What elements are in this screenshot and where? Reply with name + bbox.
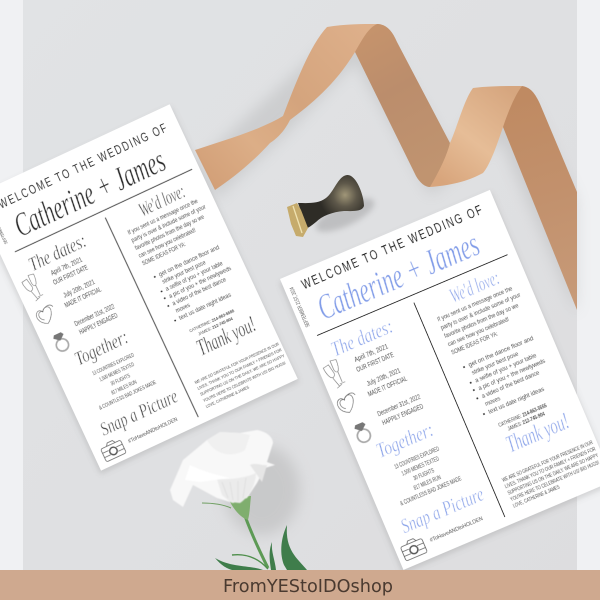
together stats xyxy=(84,349,157,412)
contacts: CATHERINE: 214-863-5555 xyxy=(188,308,236,334)
message paragraph: party is over & include some of your xyxy=(130,204,207,244)
message paragraph: party is over & include some of your xyxy=(440,291,522,332)
icon: hearts xyxy=(34,304,59,327)
hashtag: #ToHaveANDtoHOLDEN xyxy=(127,417,179,445)
icon: hearts xyxy=(335,392,361,416)
title: WELCOME TO THE WEDDING OF xyxy=(299,202,484,293)
heading: the dates: The dates: xyxy=(327,314,397,361)
message paragraph xyxy=(127,196,218,267)
heading: together: Together: xyxy=(71,326,132,370)
message paragraph: If you sent us a message once the xyxy=(436,285,514,323)
contacts: CATHERINE: 214-863-5555 xyxy=(498,403,548,429)
closing note: WE ARE SO GRATEFUL FOR YOUR PRESENCE IN OUR xyxy=(194,341,281,386)
together stats: 1,500 MEMES TEXTED xyxy=(401,456,441,478)
ideas list: text us date night ideas xyxy=(487,386,546,416)
ideas list: moves xyxy=(484,395,502,408)
icon: champagne flutes xyxy=(20,273,44,303)
closing note: SUPPORTING US ON THE DAILY. WE ARE SO HAPPY xyxy=(199,353,286,398)
divider: vertical xyxy=(105,217,199,417)
heading: we'd love: We'd love: xyxy=(446,265,503,308)
flower xyxy=(170,430,307,570)
flower bloom xyxy=(170,430,275,507)
ideas list: a video of the best dance xyxy=(171,276,228,307)
ideas list xyxy=(153,243,243,324)
ideas list: moves xyxy=(175,302,191,315)
message paragraph: favorite photos from the day so we xyxy=(443,302,520,340)
side note: SEPTEMBER 21ST, 2024 xyxy=(289,286,312,328)
ideas list: a pic of you + the newlyweds xyxy=(477,357,547,392)
icon: diamond ring xyxy=(52,331,71,353)
together stats: 30 FLIGHTS xyxy=(110,373,131,387)
closing note: LOVE, CATHERINE & JAMES xyxy=(512,484,561,510)
message paragraph: If you sent us a message once the xyxy=(127,198,200,237)
closing note: LOVE, CATHERINE & JAMES xyxy=(205,384,250,410)
couple names: Catherine + James xyxy=(311,224,485,328)
closing note xyxy=(194,341,292,410)
together stats: & COUNTLESS BAD JOKES MADE xyxy=(400,476,463,508)
wax seal stamp xyxy=(287,175,379,238)
ideas list: strike your best pose xyxy=(471,351,520,377)
heading: together: Together: xyxy=(373,417,437,463)
message paragraph: SOME IDEAS FOR YA: xyxy=(141,241,187,267)
heading: snap a picture: Snap a Picture xyxy=(97,385,182,441)
ideas list: a selfie of you + your table xyxy=(474,352,538,384)
together stats: 30 FLIGHTS xyxy=(413,468,435,482)
left card: black script version xyxy=(0,104,299,474)
dates list: HAPPILY ENGAGED xyxy=(78,311,119,336)
together stats: 1,500 MEMES TEXTED xyxy=(99,362,135,383)
dates list: HAPPILY ENGAGED xyxy=(381,401,425,427)
ideas list xyxy=(462,334,557,418)
dates list: December 31st, 2022 xyxy=(376,392,422,418)
heading: thank you: Thank you! xyxy=(193,312,260,361)
couple names: Catherine + James xyxy=(8,142,171,244)
heading: snap a picture: Snap a Picture xyxy=(397,482,487,538)
message paragraph: SOME IDEAS FOR YA: xyxy=(450,331,499,357)
together stats: 13 COUNTRIES EXPLORED xyxy=(92,353,135,377)
together stats: 817 MILES RUN xyxy=(413,475,442,492)
contacts: JAMES: 212-745-904 xyxy=(507,411,546,433)
together stats: 13 COUNTRIES EXPLORED xyxy=(394,446,441,471)
dates list: MADE IT OFFICIAL xyxy=(63,286,103,310)
dates list: OUR FIRST DATE xyxy=(355,350,395,374)
title: WELCOME TO THE WEDDING OF xyxy=(0,122,169,212)
ideas list: a video of the best dance xyxy=(481,369,541,400)
icon: camera xyxy=(99,437,126,462)
icon: champagne flutes xyxy=(322,359,346,390)
ideas list: get on the dance floor and xyxy=(158,244,221,278)
icon: camera xyxy=(399,536,427,561)
divider: vertical xyxy=(413,302,505,517)
dates list: July 20th, 2021 xyxy=(365,366,402,388)
ideas list: a selfie of you + your table xyxy=(165,260,224,293)
hashtag: #ToHaveANDtoHOLDEN xyxy=(429,516,484,544)
divider: horizontal xyxy=(15,169,192,252)
together stats: & COUNTLESS BAD JOKES MADE xyxy=(98,380,157,412)
divider: horizontal xyxy=(317,254,508,336)
together stats xyxy=(386,443,463,508)
together stats: 817 MILES RUN xyxy=(111,379,138,397)
message paragraph: can see how you celebrated! xyxy=(138,227,197,260)
message paragraph: can see how you celebrated! xyxy=(447,316,510,348)
dates list: MADE IT OFFICIAL xyxy=(366,374,408,398)
dates list: OUR FIRST DATE xyxy=(52,264,90,287)
ideas list: get on the dance floor and xyxy=(467,335,535,369)
ideas list: strike your best pose xyxy=(161,259,207,286)
message paragraph: favorite photos from the day so we xyxy=(134,213,206,252)
ideas list: a pic of you + the newlyweds xyxy=(168,265,233,300)
dates list: December 31st, 2022 xyxy=(73,302,116,328)
heading: we'd love: We'd love: xyxy=(135,181,189,221)
message paragraph xyxy=(436,283,533,357)
icon: diamond ring xyxy=(353,421,372,444)
dates list: July 20th, 2021 xyxy=(62,278,96,300)
shop name banner: FromYEStoIDOshop xyxy=(223,576,393,597)
flower stem and leaves xyxy=(202,496,307,570)
ribbon xyxy=(195,24,577,315)
closing note: LIVES. THANK YOU TO OUR FAMILY + FRIENDS FOR xyxy=(196,347,283,392)
heading: the dates: The dates: xyxy=(25,230,90,276)
dates list: April 7th, 2021 xyxy=(353,342,389,364)
dates list xyxy=(351,338,426,428)
dates list xyxy=(48,252,120,337)
closing note: YOU'RE HERE TO CELEBRATE WITH US! BIG HUGS! xyxy=(202,360,287,404)
right card: blue script version xyxy=(278,190,600,573)
contacts: JAMES: 212-745-904 xyxy=(197,316,234,337)
shop name banner xyxy=(0,570,600,600)
dates list: April 7th, 2021 xyxy=(50,256,84,278)
ideas list: text us date night ideas xyxy=(178,292,232,322)
